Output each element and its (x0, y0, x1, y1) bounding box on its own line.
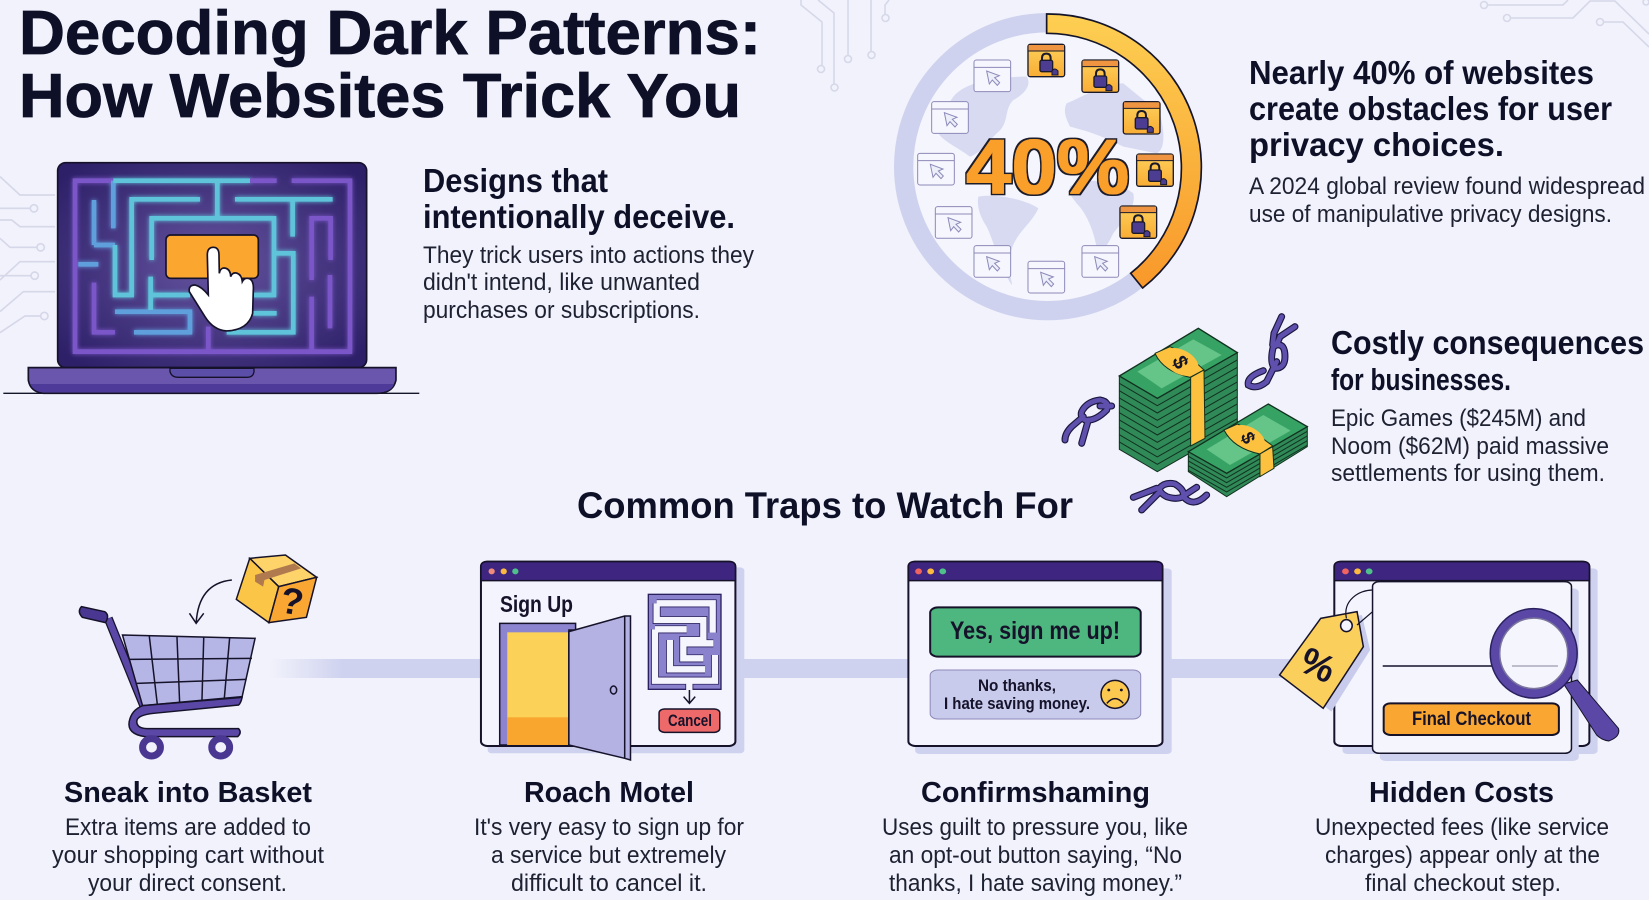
small maze (648, 594, 721, 690)
text block: costly consequences: for businesses. (1331, 362, 1511, 397)
text block: designs that deceive: purchases or subscriptions. (423, 297, 700, 324)
trap: roach motel: difficult to cancel it. (511, 870, 707, 897)
trap: confirmshaming: Uses guilt to pressure you, like (882, 814, 1188, 841)
text block: designs that deceive: intentionally deceive. (423, 198, 735, 235)
button label: yes: Yes, sign me up! (950, 617, 1120, 645)
text block: 40% of websites: use of manipulative privacy designs. (1249, 201, 1612, 228)
button label: no thanks (944, 676, 1090, 713)
trap: sneak into basket: Sneak into Basket (64, 777, 312, 809)
text block: 40% of websites: create obstacles for user (1249, 90, 1612, 127)
trap: confirmshaming: an opt-out button saying, “No (889, 842, 1182, 869)
final checkout label: Final Checkout (1412, 709, 1532, 730)
trap: hidden costs: Unexpected fees (like service (1315, 814, 1609, 841)
trap: sneak into basket: your direct consent. (88, 870, 287, 897)
icon: money stacks and broken chains: $ (1167, 352, 1193, 373)
sign up label: Sign Up (500, 591, 573, 617)
trap: hidden costs (1315, 777, 1609, 897)
text block: 40% of websites (1249, 54, 1645, 228)
trap: sneak into basket: your shopping cart without (52, 842, 324, 869)
title: Decoding Dark Patterns: (19, 0, 761, 68)
icon: laptop with maze and pointing hand (3, 163, 419, 393)
text block: 40% of websites: Nearly 40% of websites (1249, 54, 1594, 91)
text block: costly consequences: settlements for using them. (1331, 460, 1605, 487)
icon: money stacks and broken chains: $ (1236, 429, 1260, 447)
title (19, 0, 761, 131)
locked website windows (1028, 44, 1173, 238)
trap: confirmshaming: Confirmshaming (921, 777, 1150, 809)
trap: roach motel: Roach Motel (524, 777, 694, 809)
text block: designs that deceive: didn't intend, like unwanted (423, 269, 700, 296)
text block: designs that deceive: Designs that (423, 162, 608, 199)
trap: roach motel: It's very easy to sign up for (474, 814, 744, 841)
neutral website windows (918, 60, 1119, 293)
40 percent number: 40% (966, 124, 1129, 210)
chart: 40% ring around globe (904, 14, 1201, 311)
connector bar (270, 659, 1310, 678)
world map (937, 77, 1163, 285)
text block: designs that deceive: They trick users into actions they (423, 242, 755, 269)
card: confirmshaming window (908, 562, 1172, 754)
decorative circuit traces (0, 0, 1649, 333)
card: checkout window with price tag and magnifier (1280, 562, 1619, 761)
trap: hidden costs: charges) appear only at the (1325, 842, 1600, 869)
trap: confirmshaming: thanks, I hate saving money.” (889, 870, 1182, 897)
box question mark: ? (277, 579, 307, 624)
text block: costly consequences: Epic Games ($245M) and (1331, 405, 1586, 432)
tag percent: % (1293, 640, 1342, 692)
trap: sneak into basket (52, 777, 324, 897)
trap: roach motel (474, 777, 744, 897)
text block: costly consequences (1331, 324, 1644, 487)
icon: money stacks and broken chains (1065, 317, 1307, 510)
text block: 40% of websites: privacy choices. (1249, 126, 1504, 163)
trap: hidden costs: final checkout step. (1365, 870, 1561, 897)
text block: costly consequences: Noom ($62M) paid massive (1331, 433, 1609, 460)
icon: shopping cart with mystery box (79, 555, 317, 756)
trap: confirmshaming (882, 777, 1188, 897)
trap: hidden costs: Hidden Costs (1369, 777, 1554, 809)
section heading: Common Traps to Watch For (577, 485, 1073, 526)
button label: no thanks: No thanks, (978, 676, 1056, 695)
trap: sneak into basket: Extra items are added to (65, 814, 311, 841)
title: How Websites Trick You (19, 62, 741, 131)
card: sign-up window with door and maze (481, 562, 744, 760)
trap: roach motel: a service but extremely (491, 842, 727, 869)
button label: no thanks: I hate saving money. (944, 694, 1090, 713)
cancel label: Cancel (668, 711, 712, 730)
text block: designs that deceive (423, 162, 755, 324)
